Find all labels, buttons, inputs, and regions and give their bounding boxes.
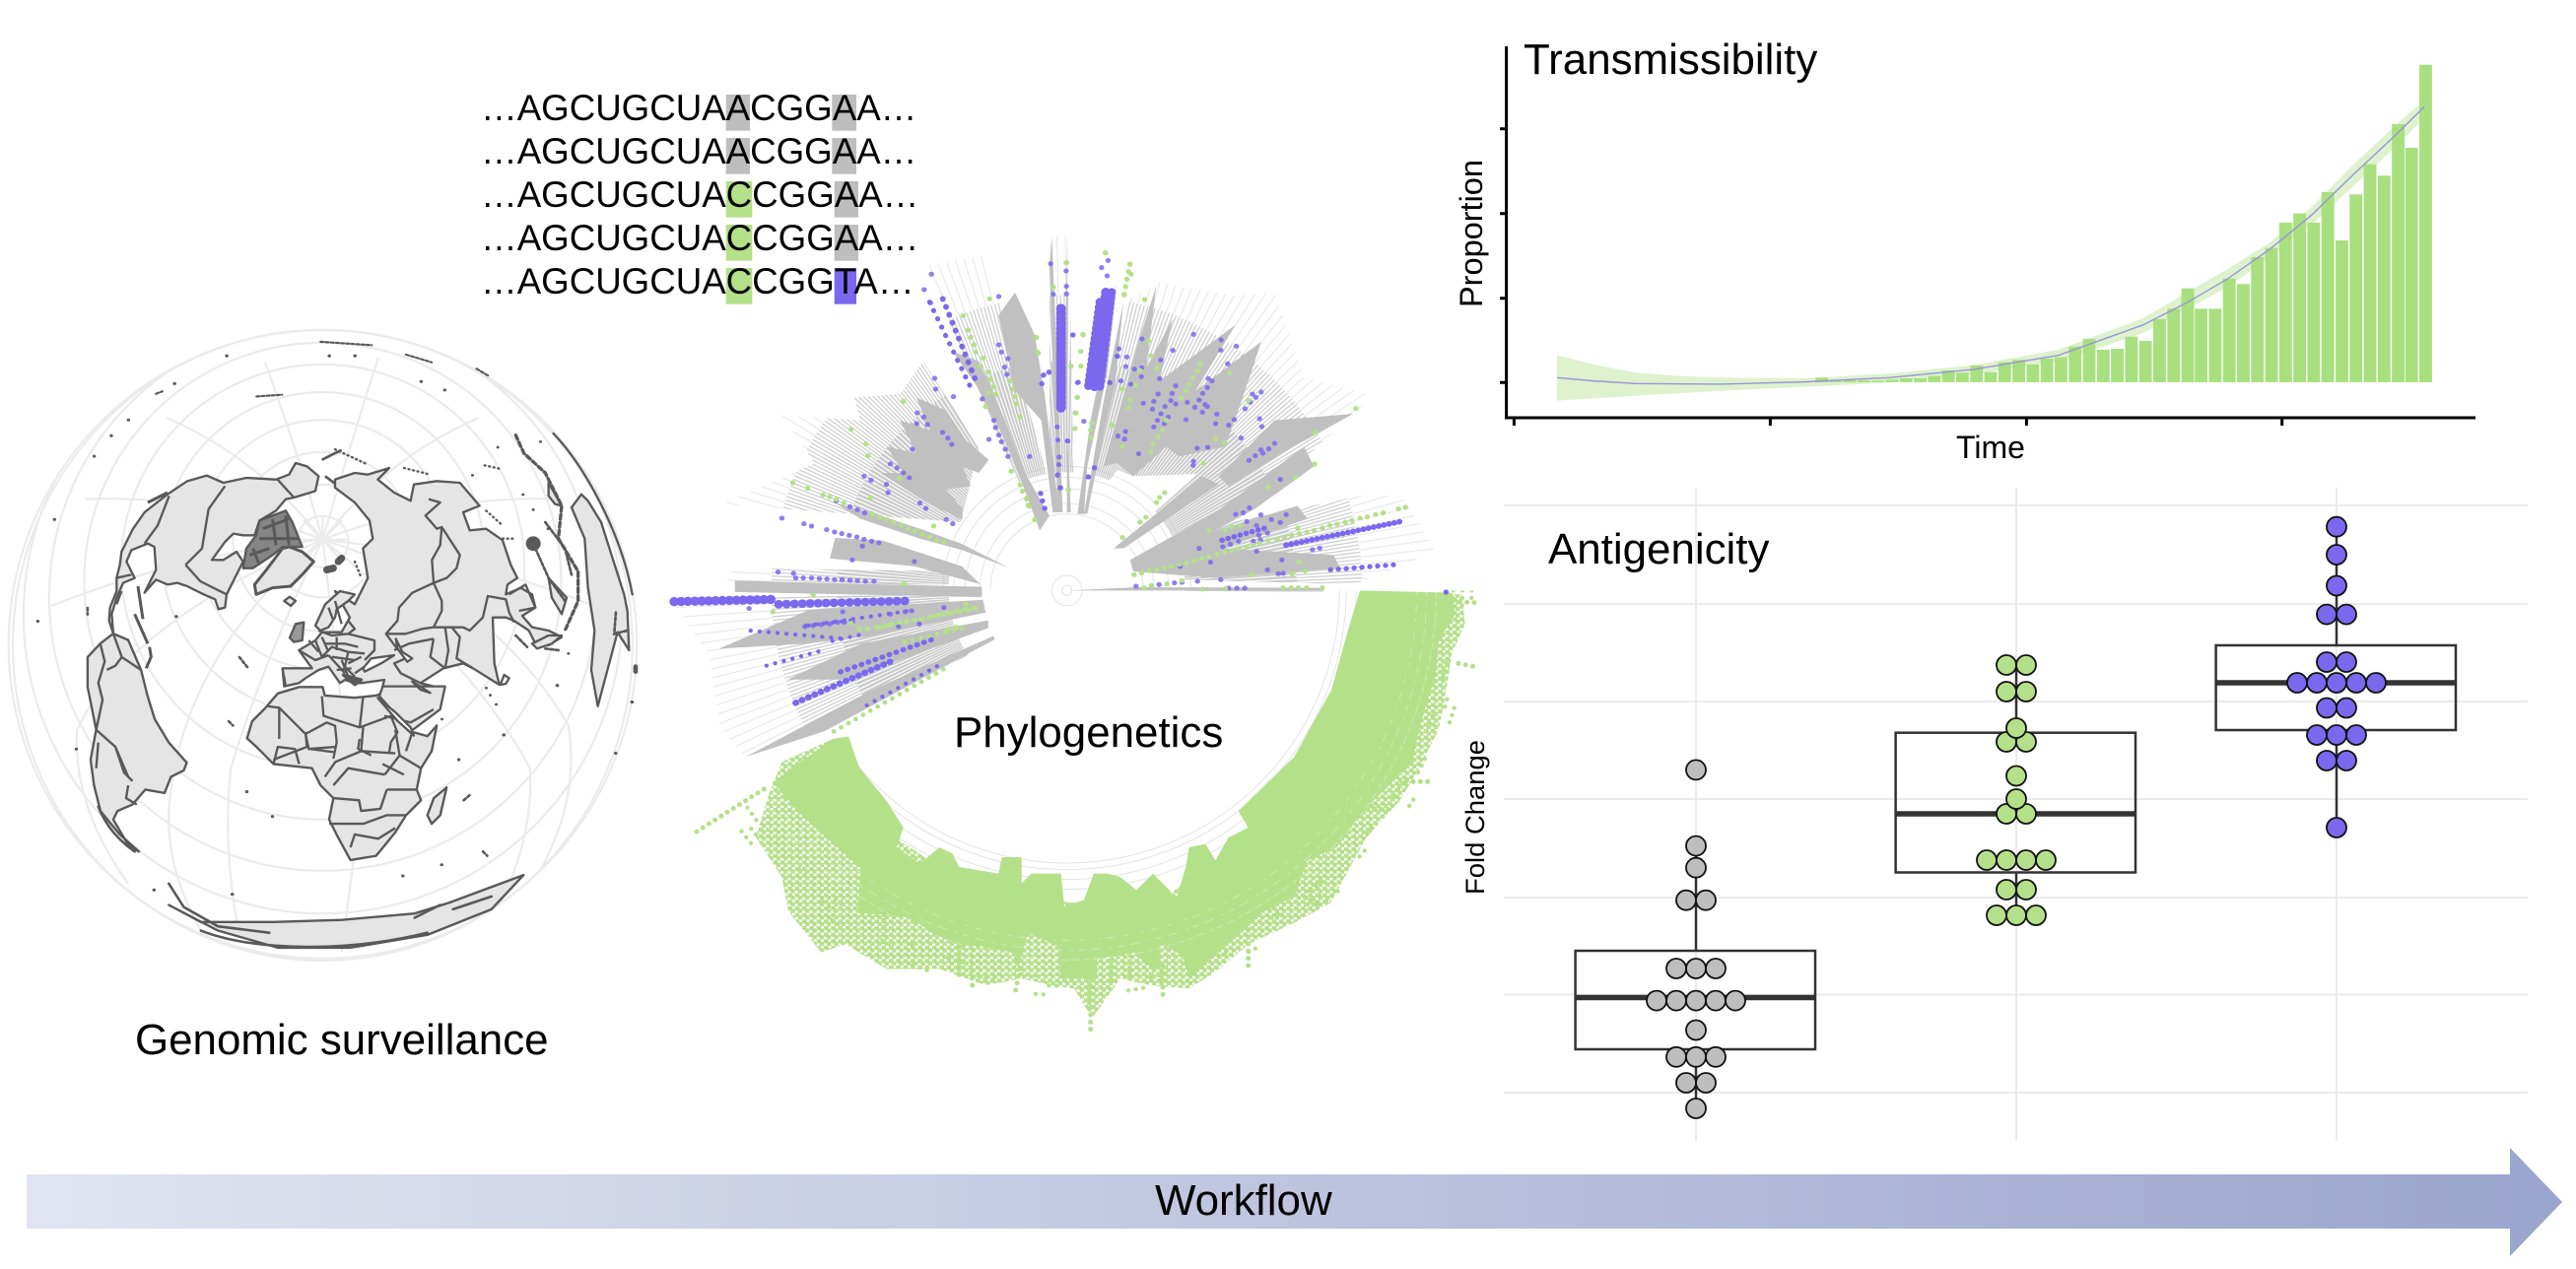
plot grid [1504, 488, 2528, 1141]
scattered purple tips, right [1041, 260, 1320, 588]
scattered purple tips [749, 264, 1118, 627]
chart plot: bars and trend [1557, 65, 2432, 401]
green ring outer band [756, 593, 1465, 1018]
sequence text [481, 88, 918, 301]
row 5 highlights [726, 268, 856, 304]
outlying islands and coastlines [335, 434, 636, 735]
purple points [2287, 517, 2386, 837]
y axis label: Fold Change [1460, 740, 1490, 895]
sequence text: …AGCUGCUACCGGAA… [481, 218, 918, 258]
heading: Workflow: Workflow [1155, 1176, 1332, 1225]
sequence text: …AGCUGCUAACGGAA… [481, 88, 916, 128]
sequence text: …AGCUGCUAACGGAA… [481, 131, 916, 171]
scattered green tips [773, 253, 1130, 629]
row 4 highlights [726, 225, 858, 261]
panel: sequence alignment [481, 88, 918, 304]
land: north america and greenland [109, 450, 345, 668]
chart: circular phylogenetic tree [662, 186, 1475, 1032]
row 1 highlights [726, 95, 856, 131]
green ring dot spikes [697, 601, 1475, 1032]
sequence text: …AGCUGCUACCGGAA… [481, 174, 918, 215]
heading: Genomic surveillance: Genomic surveillance [135, 1016, 549, 1064]
confidence band [1557, 100, 2424, 401]
land: south america, africa, antarctica, madagascar [88, 634, 523, 948]
green tips ring [772, 590, 1456, 978]
arrow: workflow [27, 1148, 2562, 1256]
tree inner arcs [768, 292, 1366, 890]
chart: antigenicity box plots [1460, 488, 2528, 1141]
chart: transmissibility [1454, 35, 2475, 465]
heading: Antigenicity: Antigenicity [1548, 525, 1770, 573]
scattered green tips, right [1027, 253, 1405, 589]
purple tip clusters [674, 293, 1401, 604]
land: eurasia and australia [283, 468, 629, 731]
y axis label: Proportion [1454, 160, 1489, 307]
row 2 highlights [726, 138, 856, 174]
axes and ticks [1500, 46, 2475, 426]
green ring outer dots [739, 591, 1474, 997]
median lines [1576, 683, 2456, 997]
heading: Phylogenetics: Phylogenetics [954, 708, 1223, 757]
country borders in africa and south america [97, 634, 421, 847]
dense gray branches, right [1067, 286, 1353, 590]
gray points [1647, 760, 1745, 1118]
far islands and antarctic coast [37, 342, 632, 947]
panel: genomic surveillance world map [9, 315, 637, 961]
purple tip at ring edge [1444, 589, 1449, 595]
feathered gray branches [670, 236, 1434, 754]
dense gray branches, upper left [835, 236, 1117, 568]
green ring row texture [757, 591, 1437, 961]
fitted curve [1557, 106, 2424, 384]
green points [1977, 655, 2056, 925]
whiskers and boxes [1576, 527, 2456, 1108]
dense gray branches and tips, lower left [719, 538, 994, 757]
sequence text: …AGCUGCUACCGGTA… [481, 261, 915, 301]
map graticule [9, 315, 637, 961]
x axis label: Time [1956, 430, 2025, 465]
europe and near east detail [266, 591, 431, 759]
heading: Transmissibility: Transmissibility [1524, 35, 1817, 84]
row 3 highlights [726, 181, 858, 218]
proportion bars [1815, 65, 2432, 382]
